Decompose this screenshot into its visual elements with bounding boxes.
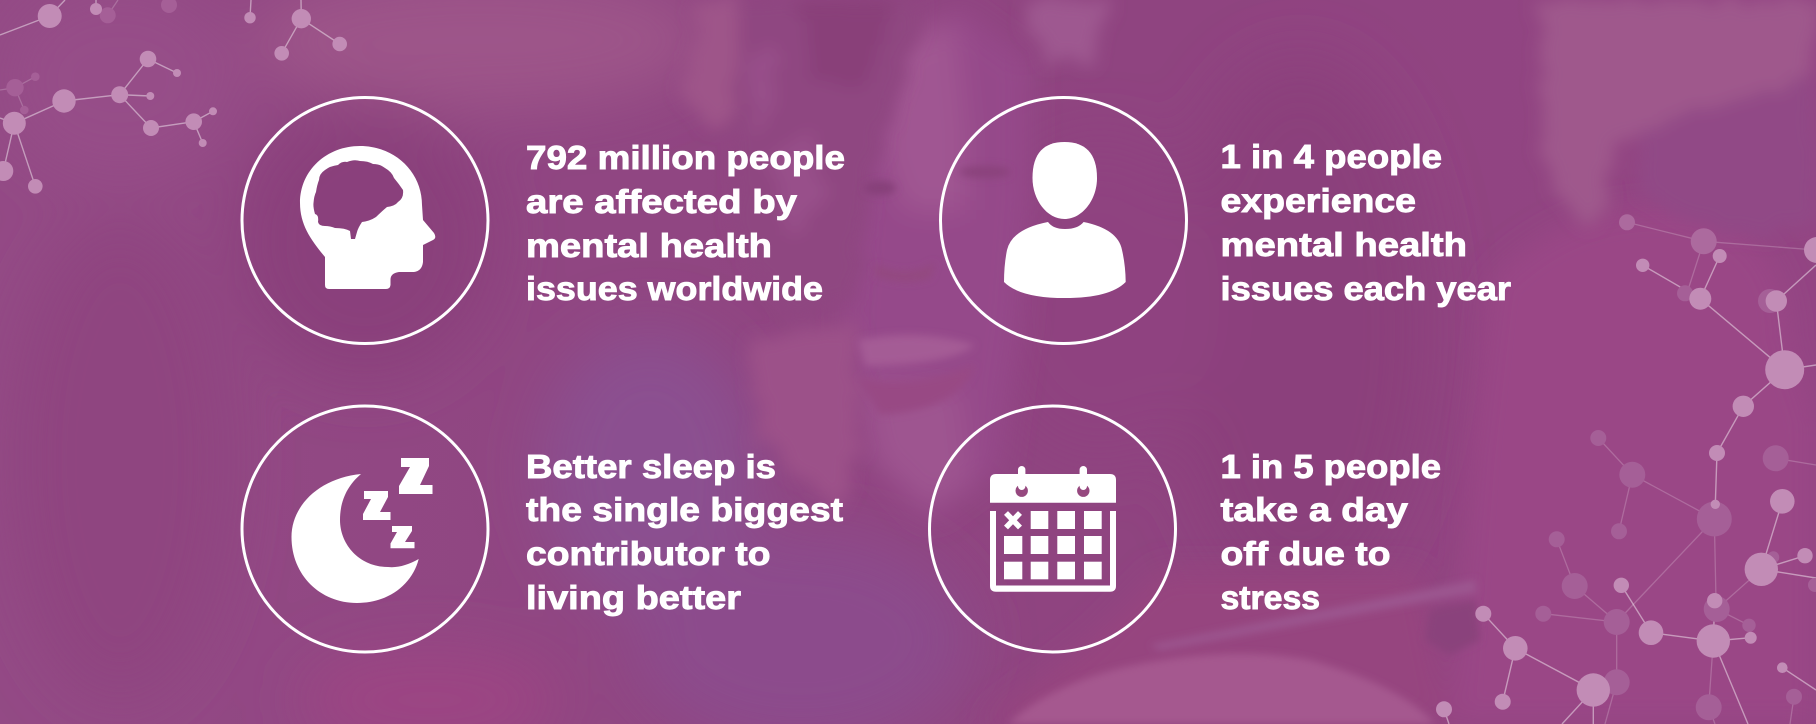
text: 1 in 4 people: 1 in 4 people bbox=[1220, 138, 1442, 175]
text: 1 in 5 people: off due to bbox=[1220, 535, 1390, 572]
shoulder highlight bbox=[1008, 654, 1435, 724]
text: 792 million people: mental health bbox=[526, 227, 772, 264]
icon: person bbox=[1004, 142, 1126, 298]
eyes bbox=[864, 181, 896, 195]
right arm bbox=[1450, 206, 1816, 724]
shoulder strap bbox=[980, 570, 1450, 724]
text: 1 in 4 people: experience bbox=[1220, 182, 1416, 219]
panel: better sleep bbox=[242, 406, 843, 652]
text: 1 in 5 people: 1 in 5 people bbox=[1220, 448, 1441, 485]
text: better sleep: living better bbox=[526, 579, 741, 616]
text: better sleep: the single biggest bbox=[526, 491, 843, 528]
ring: brain bbox=[242, 98, 488, 344]
text: 792 million people: issues worldwide bbox=[526, 270, 823, 307]
text: 792 million people: 792 million people bbox=[526, 139, 845, 176]
icon: calendar bbox=[990, 466, 1116, 592]
hair texture patches bbox=[680, 0, 1816, 510]
face bbox=[845, 10, 1030, 520]
ring: moon bbox=[242, 406, 488, 652]
text: 1 in 5 people: stress bbox=[1220, 579, 1320, 616]
panel: 1 in 4 people bbox=[940, 98, 1511, 344]
panel: 792 million people bbox=[242, 98, 845, 344]
nose shadow bbox=[875, 262, 935, 281]
text: 1 in 5 people: take a day bbox=[1220, 491, 1409, 528]
molecule network: top left bbox=[0, 0, 347, 194]
lips and teeth bbox=[858, 335, 975, 366]
text: 1 in 4 people: mental health bbox=[1220, 226, 1467, 263]
text: better sleep: Better sleep is bbox=[526, 448, 776, 485]
panel: 1 in 5 people bbox=[930, 406, 1441, 652]
sunglasses bbox=[1150, 580, 1477, 650]
ring: calendar bbox=[930, 406, 1176, 652]
text: 792 million people: are affected by bbox=[526, 183, 798, 220]
text: better sleep: contributor to bbox=[526, 535, 770, 572]
icon: head with brain bbox=[300, 146, 435, 289]
text: 1 in 4 people: issues each year bbox=[1220, 270, 1511, 307]
icon: crescent moon with Z shapes bbox=[292, 458, 432, 603]
molecule network: right and bottom bbox=[1436, 214, 1816, 724]
ring: person bbox=[940, 98, 1186, 344]
